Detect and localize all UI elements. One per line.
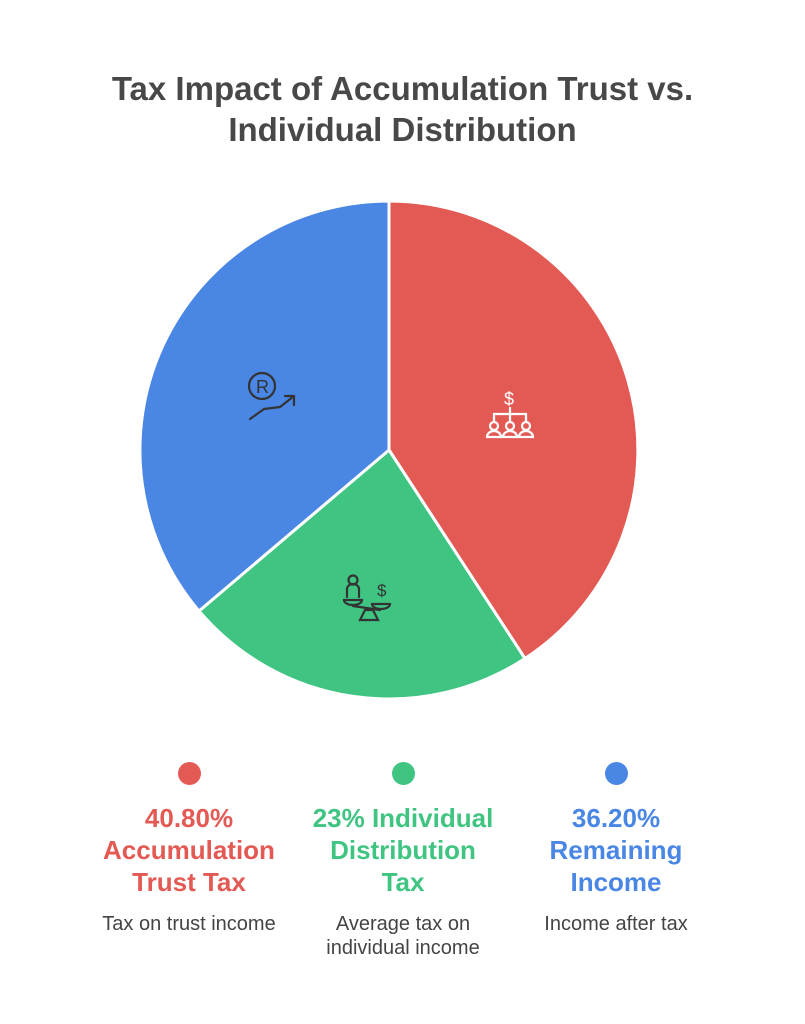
title <box>112 70 693 148</box>
legend: individual distribution tax: 23% Individual <box>313 803 493 833</box>
icon: money growth: R <box>256 377 269 397</box>
legend: remaining income <box>544 762 688 935</box>
legend: remaining income: Income after tax <box>544 913 688 935</box>
slice: remaining income <box>140 201 389 611</box>
legend: accumulation trust tax <box>102 762 276 935</box>
slice: accumulation trust tax <box>389 201 638 658</box>
icon: distribution to people <box>487 389 533 437</box>
title: Tax Impact of Accumulation Trust vs. <box>112 70 693 107</box>
legend: individual distribution tax <box>313 762 493 959</box>
legend: remaining income: Income <box>570 867 662 897</box>
slice: individual distribution tax <box>199 450 525 699</box>
icon: scale with person and dollar: $ <box>377 581 387 600</box>
legend: individual distribution tax: Distribution <box>330 835 476 865</box>
legend: remaining income: 36.20% <box>572 803 660 833</box>
title: Individual Distribution <box>228 111 577 148</box>
legend: individual distribution tax: Tax <box>382 867 424 897</box>
icon: scale with person and dollar <box>344 576 390 620</box>
icon: distribution to people: $ <box>504 389 514 409</box>
legend: remaining income: Remaining <box>550 835 682 865</box>
legend: individual distribution tax: individual income <box>326 937 480 959</box>
legend: accumulation trust tax: Trust Tax <box>132 867 246 897</box>
legend: accumulation trust tax: Tax on trust income <box>102 913 276 935</box>
legend: individual distribution tax: Average tax on <box>336 913 470 935</box>
legend: accumulation trust tax: Accumulation <box>103 835 275 865</box>
legend: accumulation trust tax: 40.80% <box>145 803 233 833</box>
icon: money growth <box>249 373 294 419</box>
